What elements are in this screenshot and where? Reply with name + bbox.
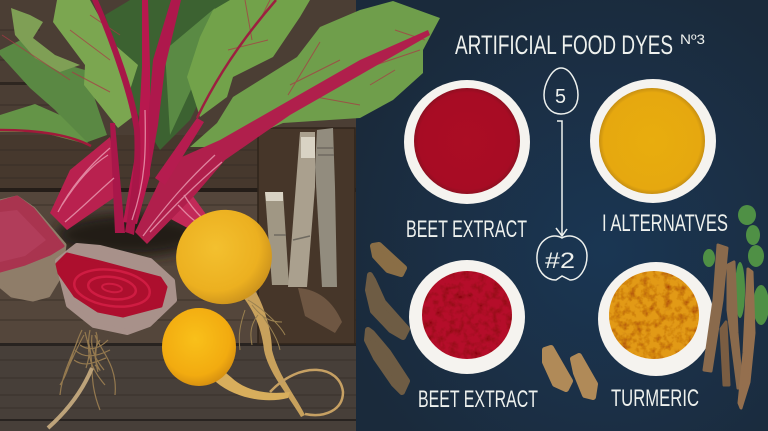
icon: wrapped stick middle bbox=[288, 132, 315, 287]
illustration: beet stems bbox=[0, 0, 430, 244]
panel: bowl beet powder bbox=[409, 260, 525, 374]
label: beet extract top: BEET EXTRACT bbox=[406, 216, 527, 243]
icon: apple number 2 bbox=[537, 236, 587, 280]
arrow bbox=[556, 121, 567, 236]
illustration: beet roots hairs bbox=[48, 330, 115, 428]
icon: wrapped stick left bbox=[265, 192, 289, 285]
icon: egg number 5 bbox=[544, 68, 578, 114]
illustration: turmeric roots left bbox=[367, 245, 407, 392]
illustration: beet leaves bbox=[0, 0, 440, 150]
illustration: cut beet left bbox=[0, 197, 64, 299]
panel: bowl beet liquid bbox=[404, 80, 530, 204]
icon: wrapped stick right bbox=[315, 128, 337, 287]
illustration: turmeric sticks and leaves right bbox=[703, 205, 768, 408]
panel: bowl yellow liquid bbox=[590, 79, 716, 203]
title: Nº3 bbox=[680, 31, 705, 47]
panel: weathered wood sticks board bbox=[258, 128, 355, 344]
panel: bowl turmeric powder bbox=[598, 262, 714, 376]
illustration: golden beet large bbox=[162, 196, 343, 417]
label: turmeric: TURMERIC bbox=[611, 385, 699, 412]
title: ARTIFICIAL FOOD DYES bbox=[455, 30, 673, 60]
panel: chalkboard background bbox=[356, 0, 768, 431]
panel: wooden table background bbox=[0, 0, 358, 431]
illustration: turmeric roots centre bbox=[545, 348, 595, 397]
label: beet extract bottom: BEET EXTRACT bbox=[418, 386, 538, 413]
icon: apple number 2: #2 bbox=[545, 248, 575, 273]
icon: egg number 5: 5 bbox=[555, 86, 566, 108]
illustration: cut beet centre bbox=[57, 246, 174, 332]
leaf veins bbox=[2, 0, 425, 105]
illustration: golden beet small bbox=[162, 308, 236, 386]
